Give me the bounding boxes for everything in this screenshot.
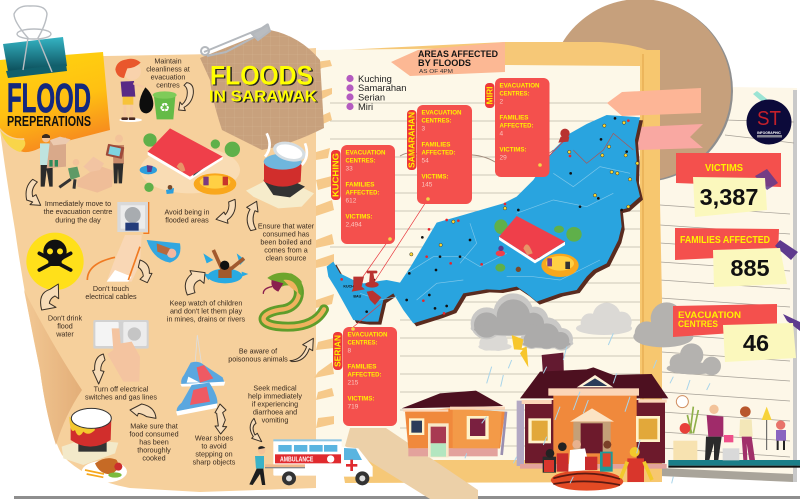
text: seek medical help: if experiencing [252,400,298,408]
text: seek medical help: help immediately [248,392,302,400]
card: serian: EVACUATION [348,332,388,338]
card: serian: CENTRES: [348,340,378,346]
value: victims: 3,387 [700,184,758,210]
text: cooked food: has been [139,438,169,446]
legend: affected areas: Miri [358,101,373,112]
legend: affected areas [346,73,406,112]
tab: miri [485,83,494,108]
text: avoid flooded areas: Avoid being in [164,208,210,216]
icon: safety pin [201,24,270,56]
card: samarahan [417,105,472,204]
card: miri: CENTRES: [500,90,530,98]
icon: plate of chicken [82,458,127,483]
card: samarahan: 54 [422,158,429,164]
text: move to evacuation centre: Immediately move to [45,199,111,208]
legend: affected areas: Samarahan [358,82,406,93]
family on flooded floor [668,396,800,468]
heading: preperations: PREPERATIONS [7,113,91,130]
text: electrical switches: Turn off electrical [94,384,148,394]
icon: recycling bin: ♻ [159,101,170,115]
heading: floods in sarawak: IN SARAWAK [209,88,318,106]
value: families affected: 885 [730,255,770,281]
text: boiled water: consumed has [263,230,310,238]
icon: parent and child in pool [147,240,180,263]
icon: paramedic [249,446,265,485]
arrow: medical [250,418,262,442]
card: samarahan: FAMILIES [422,142,451,148]
heading: floods in sarawak: IN SARAWAK [210,90,319,106]
card: miri: 2 [500,98,504,106]
rescue boat [543,440,652,491]
icon: boy with rubbish bag [115,59,144,122]
card: serian: 215 [348,380,359,386]
value: evacuation centres: 46 [743,330,769,356]
icon: boiling pot on stove [246,133,314,208]
torn paper edge [314,60,334,428]
text: flood water: Don't drink [48,314,82,322]
panel: flood preperations note [0,52,110,152]
card: miri: VICTIMS: [500,146,526,154]
map shadow [330,118,643,326]
arrow: make sure [130,404,156,418]
card: kuching: VICTIMS: [346,214,372,220]
text: cooked food: Make sure that [130,422,178,430]
text: maintain cleanliness: cleanliness at [146,64,190,74]
icon: flooded hall [140,128,240,195]
legend: affected areas: Kuching [358,73,392,84]
card: miri: EVACUATION [500,82,540,90]
icon: ambulance [265,439,373,485]
label: centres: CENTRES [678,319,719,330]
heading: floods in sarawak: FLOODS [210,60,313,90]
ambulance label: AMBULANCE [280,457,314,464]
text: electrical cables: electrical cables [85,292,137,301]
icon: hanging sneakers [176,335,225,416]
tab: kuching: KUCHING [332,153,340,197]
icon: flooded hall on map [494,216,582,277]
logo: st infographic: ST [757,108,781,130]
text: poisonous animals: poisonous animals [228,354,288,364]
card: serian: 719 [348,404,359,410]
panel: evacuation centres [673,304,800,362]
text: poisonous animals: Be aware of [239,346,277,356]
text: electrical cables: Don't touch [93,284,129,293]
panel: areas affected ribbon [391,42,505,76]
map place labels [343,284,362,298]
clouds [471,293,721,375]
text: seek medical help: diarrhoea and [253,408,297,416]
heading: floods in sarawak [209,60,319,106]
text: as of 4pm: AS OF 4PM [419,69,453,75]
icon: recycling bin [153,91,177,119]
card: kuching: 612 [346,198,357,204]
card: serian: FAMILIES [348,364,377,370]
text: flood water: water [55,330,74,338]
decorative brown circle [549,0,733,182]
arrow: shoes [215,404,227,434]
card: samarahan: EVACUATION [422,110,462,116]
text: seek medical help: Seek medical [253,384,297,392]
guide illustrations, lower area [26,233,373,485]
card: samarahan: CENTRES: [422,118,452,124]
card: kuching: FAMILIES [346,182,375,188]
ribbon: salmon banner [607,88,701,116]
text: boiled water: comes from a [264,246,308,254]
icon: child in water [203,250,248,283]
panel: notebook back and spine [340,42,662,483]
text: maintain cleanliness: Maintain [154,56,182,66]
connector lines [352,142,563,328]
card: serian: AFFECTED: [348,372,382,378]
guide illustrations, top area [26,59,314,233]
text: cooked food: food consumed [129,430,179,438]
panel: families affected [675,228,798,287]
tab: serian: SERIAN [334,335,342,367]
text: wear shoes: Wear shoes [195,434,233,442]
bottom shadow bar [14,496,800,499]
text: seek medical help: vomiting [262,416,288,424]
arrow: keep watch [185,271,205,295]
icon: movers with boxes [40,134,124,193]
card: kuching: AFFECTED: [346,190,380,196]
text: maintain cleanliness: evacuation [151,72,185,82]
text: cooked food: cooked [142,454,166,462]
panel: victims [676,153,781,217]
icon: map pins [352,129,570,305]
text: boiled water: Ensure that water [258,222,314,230]
text: watch children: in mines, drains or rivers [167,314,246,324]
arrow: electrical cables [138,260,152,283]
card: samarahan: AFFECTED: [422,150,456,156]
card: serian: VICTIMS: [348,396,374,402]
heading: floods in sarawak: FLOODS [212,62,314,92]
icon: rubbish bag [139,87,153,113]
card: miri: 4 [500,130,504,138]
bottom scene [402,293,800,491]
text: boiled water: been boiled and [260,238,312,246]
map place labels: BAU [353,294,362,298]
icon: cobra [263,273,324,327]
arrow: flood water [41,284,59,310]
logo: st infographic: INFOGRAPHIC [757,131,781,135]
label: victims: VICTIMS [705,163,743,174]
card: miri: AFFECTED: [500,122,534,130]
card: miri [495,78,550,177]
card: kuching: 33 [346,166,353,172]
small house [402,391,506,457]
lightning [512,335,528,367]
arrow: evacuation centre [26,179,41,205]
arrow: ensure [247,201,258,231]
card: kuching [341,145,395,244]
card: kuching: 2,494 [346,222,362,228]
map place labels: KUCHING [343,284,361,288]
text: wear shoes: to avoid [201,442,227,450]
text: move to evacuation centre: the evacuation centre [44,207,112,216]
text: flood water: flood [57,322,73,330]
logo: st infographic [746,91,792,144]
panel: left notebook page [316,48,640,460]
rain [465,333,710,483]
text: avoid flooded areas: flooded areas [165,216,209,224]
big house [517,353,668,469]
text: move to evacuation centre: during the day [55,215,101,224]
text: wear shoes: stepping on [195,450,233,458]
icon: light switches and hand [93,320,149,382]
arrow: cleanliness [179,83,193,111]
card: miri: FAMILIES [500,114,529,122]
icon: hand with plug [87,235,142,282]
card: serian [343,327,397,426]
card: samarahan: VICTIMS: [422,174,448,180]
text: watch children: Keep watch of children [170,298,242,308]
card: miri: 29 [500,154,507,162]
icon: plug socket [117,202,149,233]
card: samarahan: 3 [422,126,426,132]
card: kuching: CENTRES: [346,158,376,164]
icon: binder clip [3,6,67,78]
legend: affected areas: Serian [358,92,385,102]
text: maintain cleanliness: centres [156,80,180,90]
arrow: poisonous animals [290,338,313,362]
card: serian: 8 [348,348,352,354]
label: evacuation centres: EVACUATION [678,310,741,321]
text: cooked food: thoroughly [137,446,171,454]
ribbon: pink banner [638,124,703,150]
text: watch children: and don't let them play [170,306,242,316]
heading: areas affected: AREAS AFFECTED [418,49,498,59]
panel: orange guide paper [0,48,316,492]
panel: right notebook page [660,86,797,482]
text: boiled water: clean source [266,254,306,262]
card: kuching: EVACUATION [346,150,386,156]
map town markers [365,117,628,313]
label: families affected: FAMILIES AFFECTED [680,235,770,246]
tab: miri: MIRI [486,86,494,104]
arrow: switches [93,354,105,384]
heading: by floods: BY FLOODS [418,58,471,68]
text: electrical switches: switches and gas lines [85,392,157,402]
heading: flood: FLOOD [7,75,91,121]
map of sarawak [327,115,643,328]
map landmass [327,115,640,323]
arrow: avoid [216,199,235,223]
tab: samarahan: SAMARAHAN [408,112,416,168]
tan tape strip [345,428,478,499]
tan paper behind title [200,30,324,150]
card: samarahan: 145 [422,182,433,188]
icon: cooking pot [62,408,118,465]
icon: skull warning [26,233,84,290]
text: wear shoes: sharp objects [193,458,236,466]
